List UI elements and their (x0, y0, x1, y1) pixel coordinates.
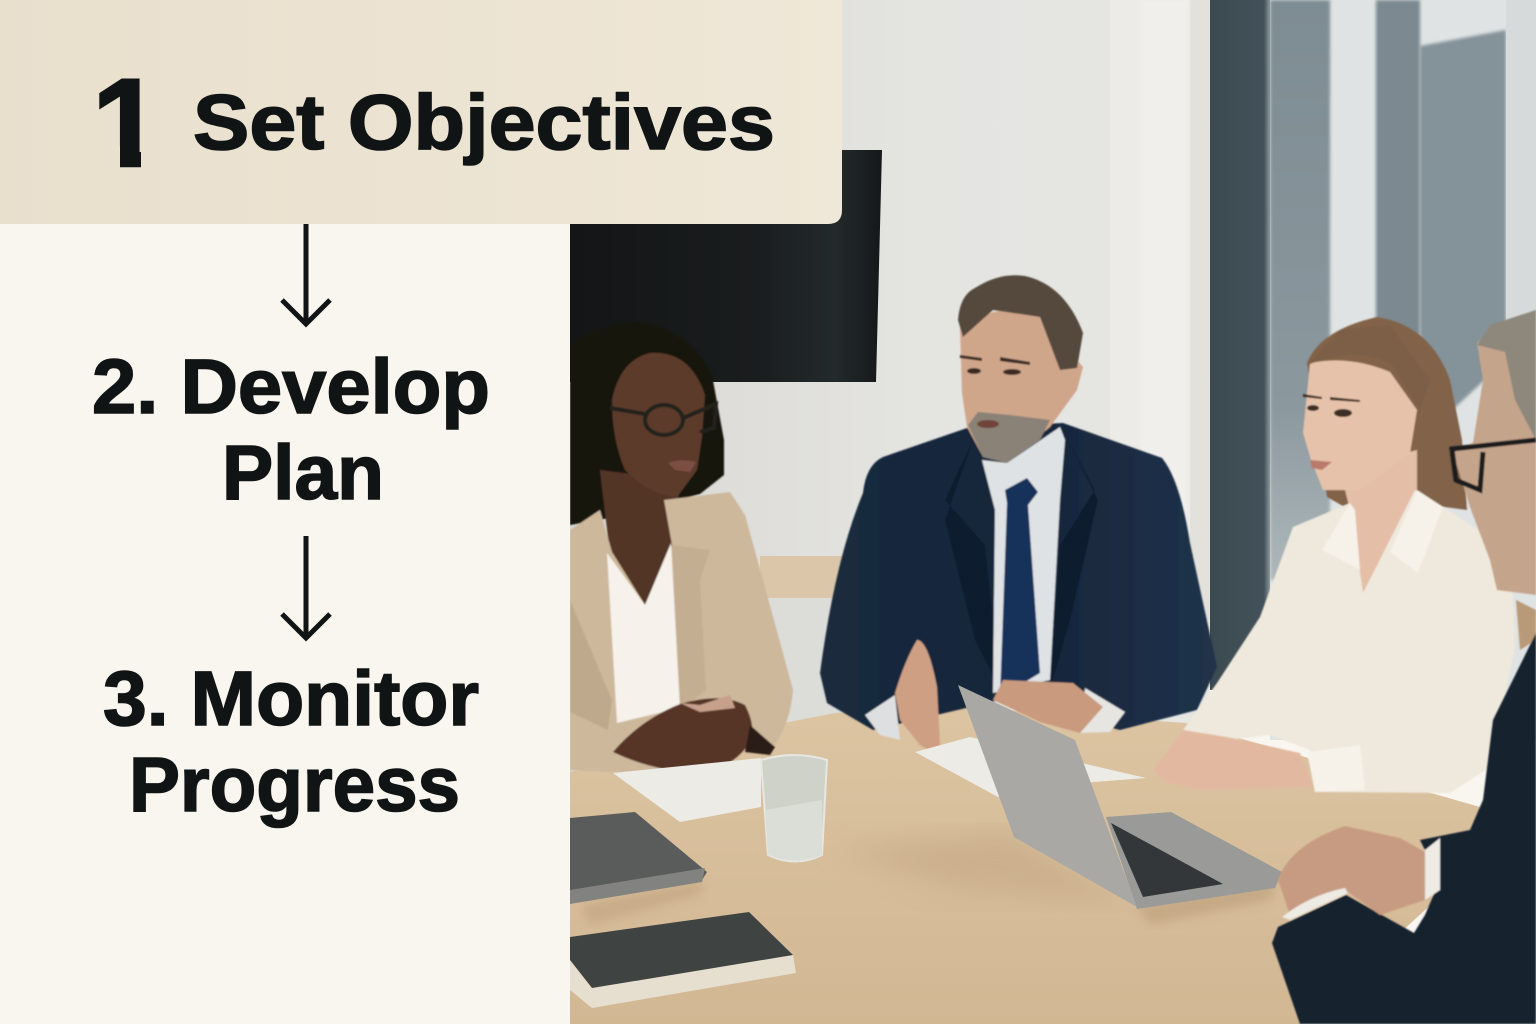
eyes (960, 355, 1030, 375)
step 3 text (103, 656, 479, 828)
right hand and cuff (1080, 688, 1125, 733)
step 2 text: Plan (222, 430, 384, 516)
collar (1390, 490, 1443, 573)
face (1303, 360, 1417, 490)
laptop (958, 685, 1282, 909)
hair behind (1516, 600, 1536, 650)
paper centre (915, 737, 1146, 797)
hands (1278, 826, 1425, 915)
notebook (570, 912, 796, 1008)
wall-mounted tv (570, 150, 882, 382)
window frame (1210, 0, 1270, 690)
lips (1310, 460, 1332, 470)
step 2 text: 2. Develop (92, 344, 490, 430)
step 1 heading: Set Objectives (193, 78, 775, 166)
white column (1110, 0, 1210, 620)
hair (1477, 310, 1536, 440)
hair side (1307, 325, 1430, 410)
head (1452, 310, 1536, 595)
eyes (1303, 394, 1360, 417)
neck (1340, 450, 1417, 593)
cuff (745, 725, 775, 755)
table shadows (830, 830, 1135, 905)
blouse (1183, 490, 1515, 793)
step 2 text (92, 344, 490, 516)
window with city view (1270, 0, 1536, 740)
photo: meeting room scene (570, 0, 1536, 1024)
blazer shading (570, 600, 612, 730)
wall background (570, 0, 1210, 1024)
man centre (820, 275, 1217, 750)
step 3 text: Progress (129, 742, 460, 828)
beard (968, 412, 1050, 463)
arrow: step 2 to step 3 (282, 536, 330, 638)
shirt (982, 427, 1065, 693)
paper left (613, 758, 761, 822)
hands (613, 698, 752, 773)
hair (958, 275, 1083, 370)
glasses (610, 404, 716, 435)
step 3 text: 3. Monitor (103, 656, 479, 742)
water glass (761, 755, 827, 862)
woman right (1153, 317, 1515, 793)
mouth (668, 460, 696, 472)
neck and chest (600, 470, 680, 605)
lapels (945, 435, 1000, 690)
blazer (570, 492, 793, 772)
hands (1153, 730, 1313, 790)
face (960, 310, 1083, 463)
arrow: step 1 to step 2 (282, 224, 330, 324)
sideboard (760, 556, 850, 723)
panel: step 1 highlight banner (0, 0, 842, 224)
blouse (607, 543, 680, 723)
jacket (820, 423, 1217, 730)
hair (1307, 317, 1467, 510)
closed laptop (570, 812, 707, 904)
left hand and cuff (865, 695, 900, 740)
panel: steps sidebar (0, 0, 570, 1024)
cuff (1307, 745, 1365, 792)
glasses (1452, 440, 1536, 490)
step 1 number: 1 (92, 54, 162, 193)
mouth (977, 420, 999, 428)
cuffs (1282, 888, 1348, 920)
face (612, 353, 705, 497)
tie (1000, 478, 1040, 697)
table (570, 707, 1480, 1024)
jacket (1272, 633, 1536, 1024)
woman left (570, 322, 793, 773)
hair (570, 322, 724, 525)
man foreground right (1272, 310, 1536, 1024)
